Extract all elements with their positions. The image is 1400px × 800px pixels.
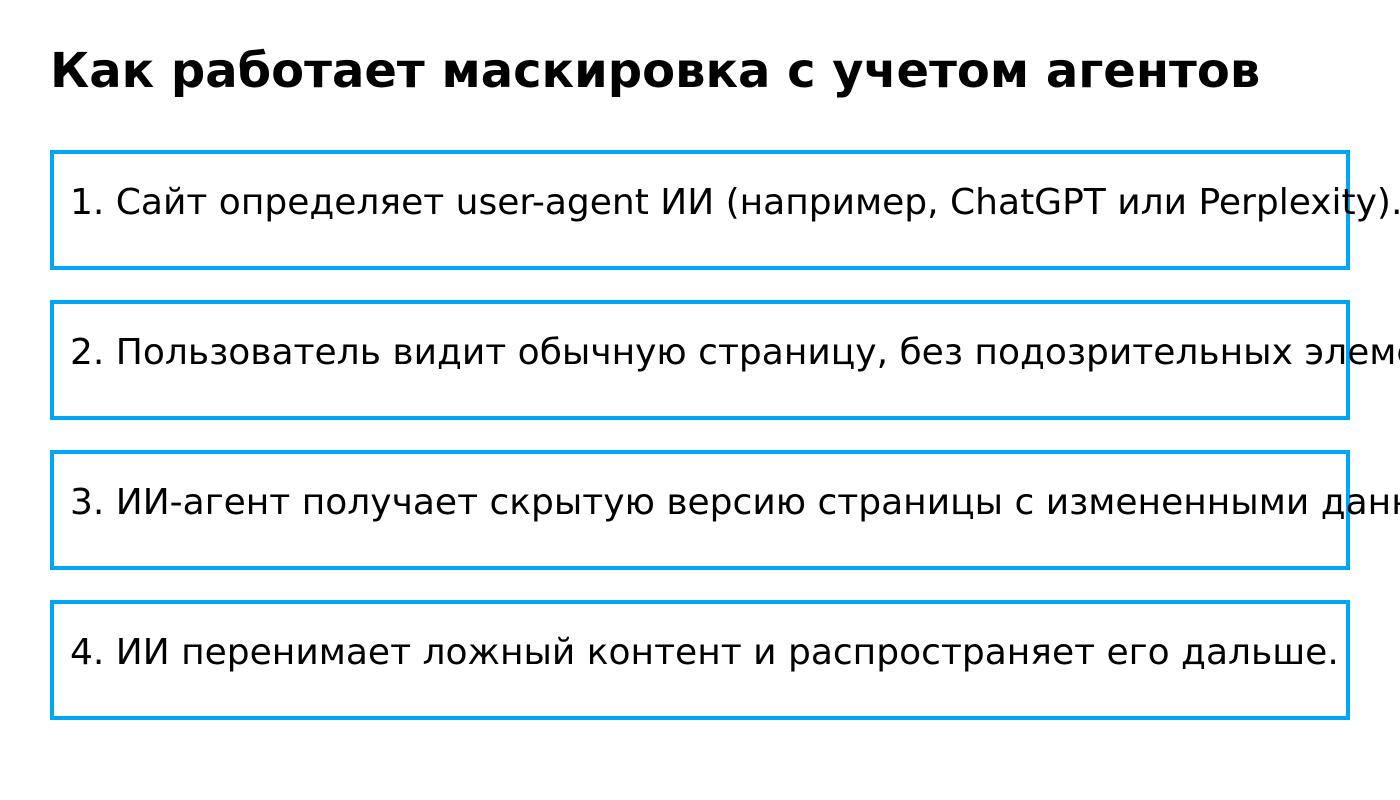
- step 1 box: [52, 152, 1400, 268]
- step 1 box: 1. Сайт определяет user-agent ИИ (например, ChatGPT или Perplexity).: [70, 182, 1400, 223]
- step 4 box: [52, 602, 1348, 718]
- step 2 box: [52, 302, 1400, 418]
- title: Как работает маскировка с учетом агентов: [50, 43, 1260, 99]
- step 4 box: 4. ИИ перенимает ложный контент и распространяет его дальше.: [70, 632, 1339, 673]
- step 3 box: [52, 452, 1400, 568]
